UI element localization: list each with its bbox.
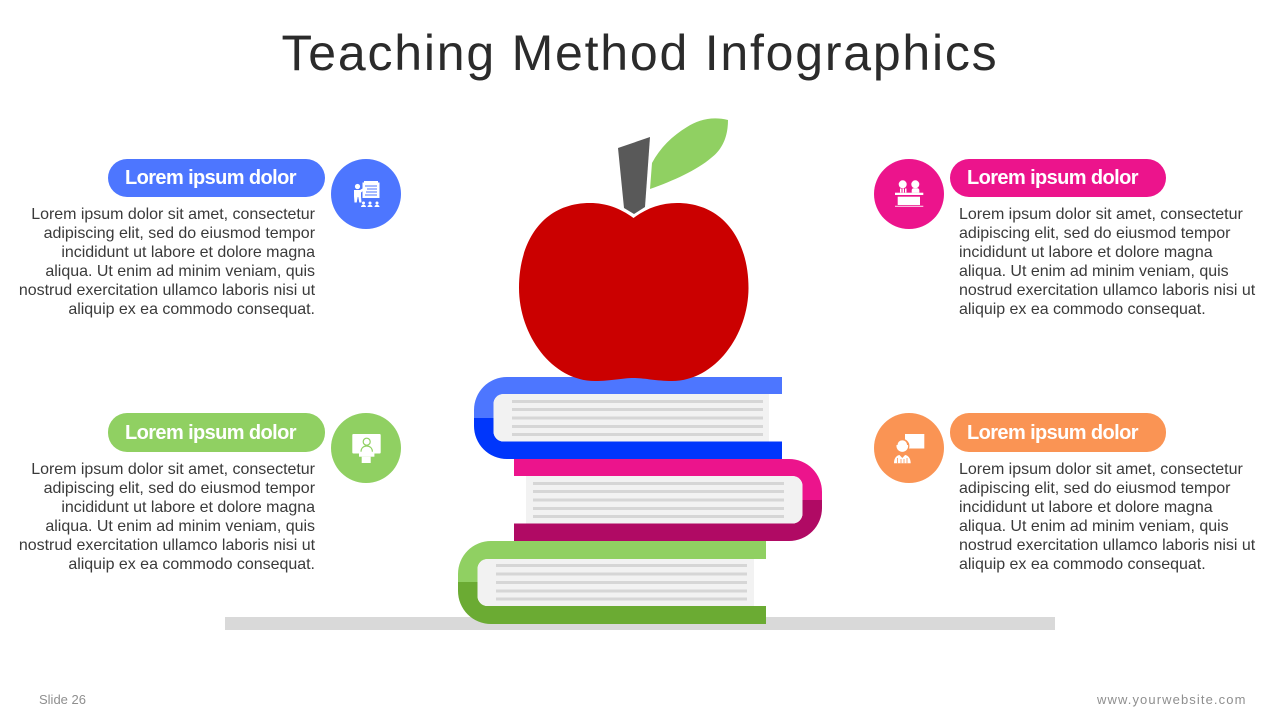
- text block: top right: incididunt ut labore et dolore magna: [959, 244, 1213, 261]
- panel: bottom right: [874, 413, 1256, 573]
- title: Teaching Method Infographics: [282, 25, 998, 81]
- text block: bottom left: aliquip ex ea commodo consequat.: [68, 556, 315, 573]
- heading pill: bottom left: Lorem ipsum dolor: [125, 422, 296, 444]
- icon: two people at desk: [874, 159, 944, 229]
- text block: bottom left: nostrud exercitation ullamco laboris nisi ut: [19, 537, 315, 554]
- panel: bottom left: [19, 413, 401, 573]
- apple: [519, 118, 748, 381]
- book: pink: [514, 459, 822, 541]
- apple stem: [618, 137, 650, 214]
- panel: top right: [874, 159, 1256, 318]
- text block: top right: adipiscing elit, sed do eiusmod tempor: [959, 225, 1230, 242]
- text block: bottom left: adipiscing elit, sed do eiusmod tempor: [44, 480, 315, 497]
- icon: speaker at lectern: [331, 413, 401, 483]
- heading pill: top left: Lorem ipsum dolor: [125, 167, 296, 189]
- footer: website: www.yourwebsite.com: [1097, 692, 1246, 707]
- icon: teacher at presentation board: [331, 159, 401, 229]
- heading pill: bottom right: Lorem ipsum dolor: [967, 422, 1138, 444]
- text block: bottom right: [959, 461, 1256, 573]
- text block: bottom left: incididunt ut labore et dolore magna: [61, 499, 315, 516]
- text block: top right: [959, 206, 1256, 318]
- text block: bottom right: nostrud exercitation ullamco laboris nisi ut: [959, 537, 1255, 554]
- shelf: [225, 617, 1055, 630]
- text block: bottom left: Lorem ipsum dolor sit amet, consectetur: [31, 461, 315, 478]
- text block: top left: adipiscing elit, sed do eiusmod tempor: [44, 225, 315, 242]
- icon: instructor with board: [874, 413, 944, 483]
- apple leaf: [650, 118, 728, 189]
- heading pill: bottom left: [108, 413, 325, 452]
- text block: top right: aliqua. Ut enim ad minim veniam, quis: [959, 263, 1229, 280]
- apple body: [519, 203, 748, 381]
- panel: top left: [19, 159, 401, 318]
- text block: top left: [19, 206, 316, 318]
- text block: bottom right: aliquip ex ea commodo consequat.: [959, 556, 1206, 573]
- text block: top right: aliquip ex ea commodo consequat.: [959, 301, 1206, 318]
- text block: top left: aliquip ex ea commodo consequat.: [68, 301, 315, 318]
- footer: slide number: Slide 26: [39, 692, 86, 707]
- text block: top right: nostrud exercitation ullamco laboris nisi ut: [959, 282, 1255, 299]
- heading pill: bottom right: [950, 413, 1166, 452]
- text block: bottom right: adipiscing elit, sed do eiusmod tempor: [959, 480, 1230, 497]
- text block: bottom right: Lorem ipsum dolor sit amet, consectetur: [959, 461, 1243, 478]
- text block: bottom left: [19, 461, 316, 573]
- text block: top left: aliqua. Ut enim ad minim veniam, quis: [45, 263, 315, 280]
- book: blue: [474, 377, 782, 459]
- heading pill: top right: [950, 159, 1166, 197]
- book: green: [458, 541, 766, 624]
- text block: bottom right: aliqua. Ut enim ad minim veniam, quis: [959, 518, 1229, 535]
- text block: top left: nostrud exercitation ullamco laboris nisi ut: [19, 282, 315, 299]
- text block: bottom right: incididunt ut labore et dolore magna: [959, 499, 1213, 516]
- text block: top right: Lorem ipsum dolor sit amet, consectetur: [959, 206, 1243, 223]
- text block: top left: Lorem ipsum dolor sit amet, consectetur: [31, 206, 315, 223]
- heading pill: top left: [108, 159, 325, 197]
- text block: top left: incididunt ut labore et dolore magna: [61, 244, 315, 261]
- text block: bottom left: aliqua. Ut enim ad minim veniam, quis: [45, 518, 315, 535]
- heading pill: top right: Lorem ipsum dolor: [967, 167, 1138, 189]
